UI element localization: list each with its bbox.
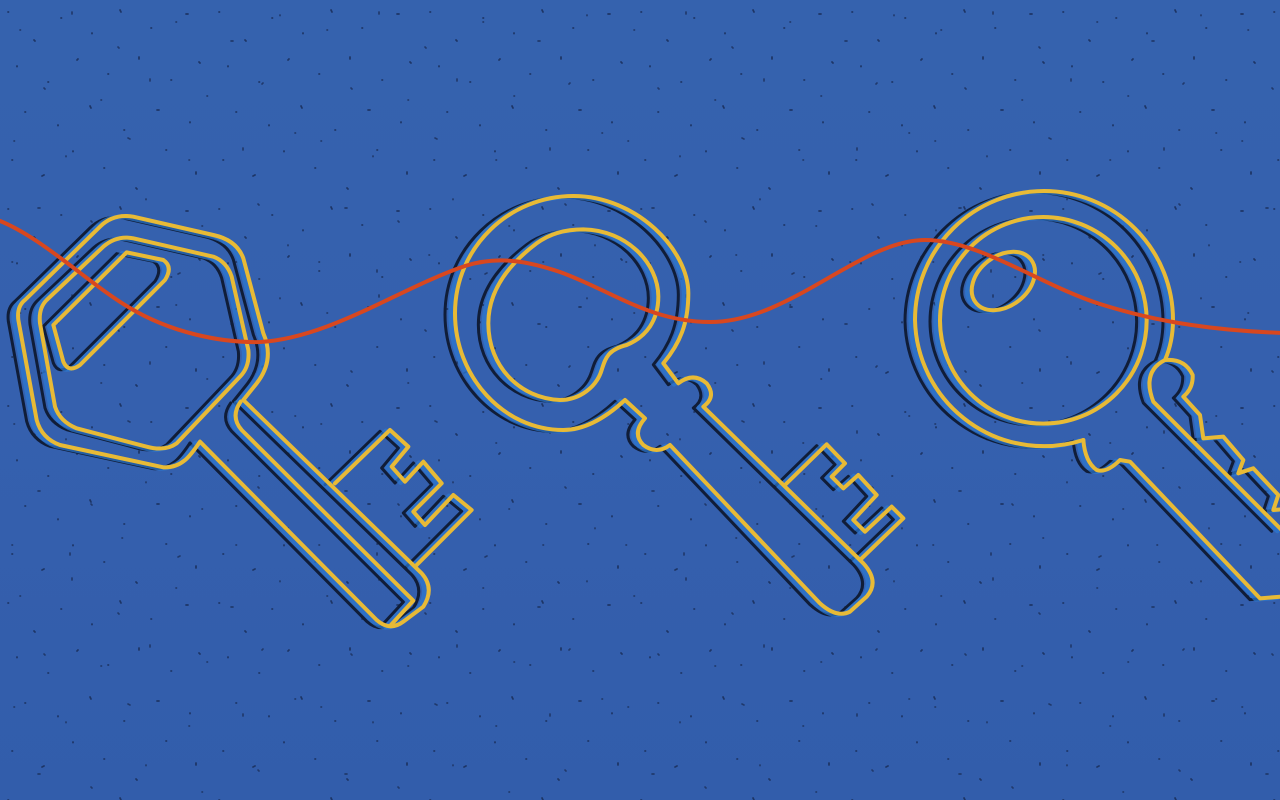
icon: hexagonal key (left) [8, 216, 472, 628]
red wavy line threading through the keys [0, 219, 1280, 342]
icon: round key with kidney-shaped hole (middle) [445, 196, 903, 615]
icon: round key with double ring and oval hole (right) [905, 191, 1280, 600]
